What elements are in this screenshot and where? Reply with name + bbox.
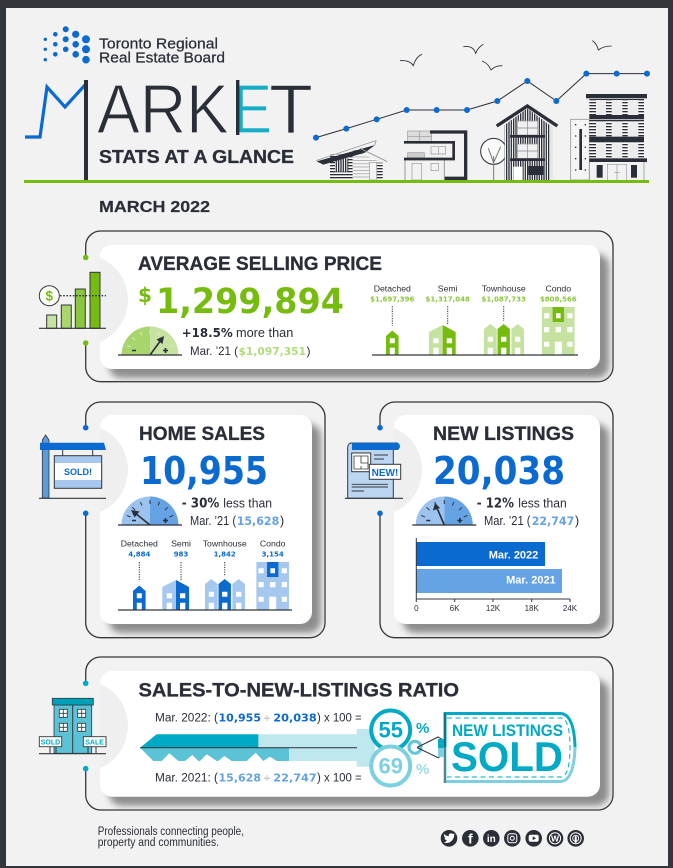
change text xyxy=(477,496,567,512)
birds xyxy=(400,41,612,70)
panel: average selling price xyxy=(39,231,613,382)
comparison text xyxy=(190,514,284,528)
panel: home sales xyxy=(39,402,325,638)
formula: March 2021: 22,747 xyxy=(273,772,317,785)
sales breakdown: 3,154 xyxy=(262,551,284,559)
house price breakdown: Condo xyxy=(545,284,571,294)
social media icons: W xyxy=(551,834,560,844)
green baseline xyxy=(24,180,649,183)
panel outline xyxy=(86,657,613,810)
house: gabled striped xyxy=(497,106,557,180)
footer tagline: Professionals connecting people, xyxy=(98,826,244,838)
comparison text: $1,097,351 xyxy=(238,346,306,358)
formula: March 2021: ÷ xyxy=(264,773,270,785)
subtitle: STATS AT A GLANCE xyxy=(99,146,294,167)
sales breakdown: Detached xyxy=(121,539,158,549)
panel outline xyxy=(86,402,325,638)
social media icons xyxy=(441,830,584,847)
big number: 1,299,894 xyxy=(156,282,344,322)
house price breakdown: Semi xyxy=(438,284,458,294)
heading: SALES-TO-NEW-LISTINGS RATIO xyxy=(138,681,459,702)
change text: +18.5% xyxy=(182,326,233,340)
change text xyxy=(182,496,272,512)
icon: sold sign xyxy=(39,435,106,498)
icon: listing document: NEW! xyxy=(372,468,398,479)
sales breakdown: 1,842 xyxy=(214,551,236,559)
sales breakdown: 4,884 xyxy=(128,551,150,559)
house price breakdown: $808,566 xyxy=(540,296,577,304)
icon: rising bars with dollar xyxy=(39,272,106,328)
change text: more than xyxy=(236,326,293,340)
sales breakdown: Townhouse xyxy=(203,539,247,549)
logo wordmark: Toronto Regional xyxy=(99,36,218,52)
heading: HOME SALES xyxy=(139,424,265,445)
panel: new listings xyxy=(345,402,613,638)
result: 55 percent: % xyxy=(416,720,429,737)
letter T: T xyxy=(269,70,313,148)
house price breakdown: $1,087,733 xyxy=(482,296,526,304)
gauge xyxy=(412,496,476,525)
comparison text: 15,628 xyxy=(237,514,279,528)
letter E: E xyxy=(233,70,272,148)
date heading: MARCH 2022 xyxy=(99,199,210,216)
formula: March 2021: 15,628 xyxy=(218,772,261,785)
tag: new listings sold: NEW LISTINGS xyxy=(452,721,563,740)
bar chart: new listings xyxy=(414,538,578,613)
logo wordmark: Real Estate Board xyxy=(99,50,225,66)
icon: building with sold and sale signs xyxy=(39,698,106,754)
bar: March 2021 xyxy=(416,569,562,593)
bar chart: new listings: 12K xyxy=(486,604,501,613)
result: 69 percent: % xyxy=(416,761,429,778)
formula: March 2021: Mar. 2021: ( xyxy=(155,773,218,785)
trend line xyxy=(313,71,650,141)
heading: AVERAGE SELLING PRICE xyxy=(138,254,382,275)
big number: 20,038 xyxy=(433,449,565,493)
comparison text: Mar. ’21 ( xyxy=(190,514,237,528)
house: shed roof xyxy=(316,141,387,180)
bar: March 2022 xyxy=(416,542,545,566)
sales breakdown: Semi xyxy=(171,539,191,549)
formula: March 2022: 20,038 xyxy=(273,712,317,725)
icon: building with sold and sale signs: SALE xyxy=(85,740,104,746)
gauge xyxy=(118,326,182,355)
change text xyxy=(182,326,293,340)
big number: 10,955 xyxy=(140,449,268,493)
letters ARK: ARK xyxy=(97,70,229,148)
icon: sold sign: SOLD! xyxy=(64,467,92,477)
comparison text: 22,747 xyxy=(532,514,574,528)
formula: March 2022: Mar. 2022: ( xyxy=(155,713,218,725)
result: 55 percent: 55 xyxy=(378,718,403,742)
formula: March 2022: ) x 100 = xyxy=(317,713,362,725)
panel outline xyxy=(86,231,613,382)
comparison text: ) xyxy=(575,514,579,528)
change text: - 30% xyxy=(182,497,219,512)
formula: March 2022: ÷ xyxy=(264,713,270,725)
house price breakdown: $1,317,048 xyxy=(426,296,470,304)
house: modern box xyxy=(404,131,466,180)
panel: sales-to-new-listings ratio xyxy=(39,657,613,810)
sales breakdown: Condo xyxy=(260,539,286,549)
bar chart: new listings: 0 xyxy=(414,604,419,613)
bar chart: new listings: Mar. 2021 xyxy=(506,575,556,587)
bar chart: new listings: 24K xyxy=(563,604,578,613)
result: 55 percent xyxy=(371,710,429,750)
house price breakdown: Detached xyxy=(374,284,411,294)
house price breakdown: $1,697,396 xyxy=(370,296,415,304)
bar chart: new listings: 18K xyxy=(525,604,539,613)
result: 69 percent: 69 xyxy=(378,754,403,778)
building: apartment xyxy=(571,94,647,180)
footer tagline: property and communities. xyxy=(98,837,219,849)
logo: Toronto Regional Real Estate Board xyxy=(44,26,225,66)
social media icons: f xyxy=(468,830,473,846)
panel outline xyxy=(380,402,613,638)
tag: new listings sold: SOLD xyxy=(451,733,563,780)
icon: rising bars with dollar: $ xyxy=(46,288,54,304)
formula: March 2022 xyxy=(155,712,362,725)
key graphic xyxy=(140,729,375,767)
result: 69 percent xyxy=(371,746,429,786)
formula: March 2021: ) x 100 = xyxy=(317,773,362,785)
bar chart: new listings: Mar. 2022 xyxy=(489,549,538,561)
icon: building with sold and sale signs: SOLD xyxy=(41,740,60,746)
change text: less than xyxy=(223,496,272,511)
change text: - 12% xyxy=(477,497,514,512)
title: MARKET xyxy=(25,70,313,183)
logo dots xyxy=(44,26,90,64)
gauge xyxy=(118,496,182,525)
skyline illustration xyxy=(313,41,650,180)
comparison text: ) xyxy=(280,514,284,528)
social media icons: in xyxy=(487,834,496,845)
house price breakdown: Townhouse xyxy=(482,284,526,294)
comparison text: Mar. ’21 ( xyxy=(190,344,238,358)
formula: March 2022: 10,955 xyxy=(218,712,261,725)
comparison text: Mar. ’21 ( xyxy=(484,514,531,528)
change text: less than xyxy=(518,496,567,511)
tree xyxy=(481,138,507,180)
formula: March 2021 xyxy=(155,772,362,785)
house price breakdown xyxy=(370,284,578,355)
key ring and string xyxy=(409,737,445,758)
tag: new listings sold xyxy=(438,713,575,783)
big number: $ xyxy=(138,283,152,307)
icon: listing document xyxy=(345,442,403,498)
chart-line M xyxy=(25,85,85,137)
comparison text xyxy=(484,514,579,528)
sales breakdown: 983 xyxy=(174,551,188,559)
sales breakdown xyxy=(118,539,292,610)
heading: NEW LISTINGS xyxy=(433,424,574,445)
comparison text xyxy=(190,344,310,358)
bar chart: new listings: 6K xyxy=(450,604,460,613)
comparison text: ) xyxy=(306,344,310,358)
